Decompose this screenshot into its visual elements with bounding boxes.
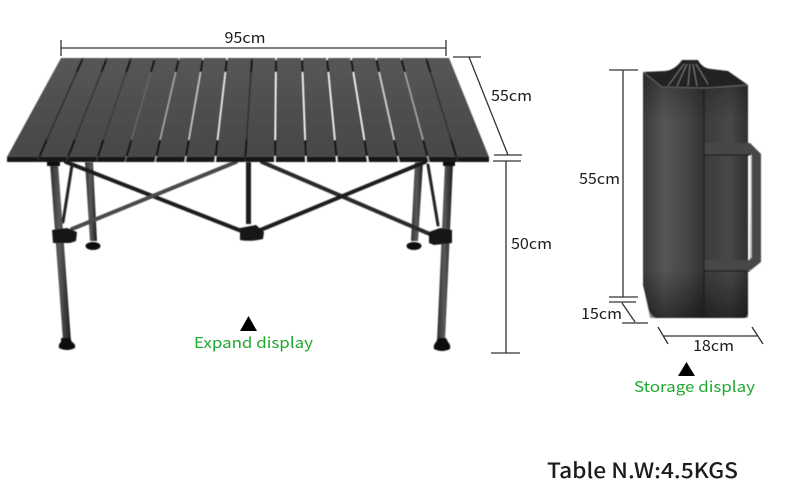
dimension: bag depth: 15cm: [581, 303, 622, 324]
carry handle: [704, 143, 761, 271]
dimension: bag height: 55cm: [579, 168, 620, 189]
marker triangle: storage: [678, 362, 695, 376]
dimension: table height: [491, 161, 552, 353]
back right leg: [406, 162, 423, 250]
dimension: table width: [61, 27, 446, 56]
net weight: Table N.W:4.5KGS: [547, 455, 738, 485]
dimension: table depth: [453, 57, 532, 155]
storage bag: [643, 60, 761, 318]
table top with slats: [7, 58, 489, 162]
dimension: table height: 50cm: [511, 233, 552, 254]
bag body: [643, 72, 748, 318]
dimension: table width: 95cm: [224, 27, 266, 48]
label: expand display: Expand display: [194, 332, 313, 353]
slat gaps: [37, 58, 458, 162]
centre leg and clamp: [240, 162, 264, 241]
dimension: bag depth: [581, 302, 648, 324]
dimension: bag width: [658, 327, 763, 356]
dark slat gap dashes: [40, 60, 456, 156]
label: storage display: Storage display: [634, 376, 755, 397]
front right leg: [429, 161, 455, 351]
dimension: bag width: 18cm: [693, 335, 734, 356]
dimension: table depth: 55cm: [491, 85, 532, 106]
marker triangle: expand: [240, 316, 257, 331]
back left leg: [85, 162, 100, 250]
dimension: bag height: [579, 70, 638, 297]
front left leg: [47, 161, 77, 350]
drawstring top: [643, 60, 748, 88]
cross braces: [63, 162, 438, 235]
table underframe and legs: [47, 161, 455, 351]
